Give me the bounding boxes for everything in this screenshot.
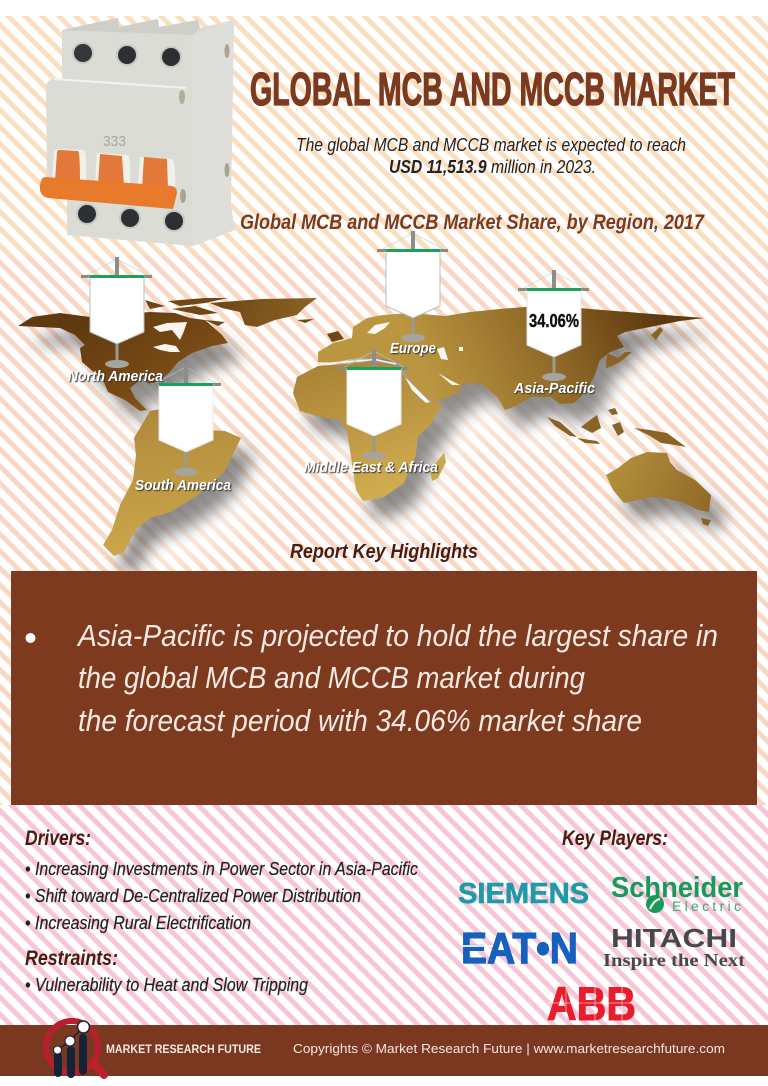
drivers list: • Increasing Investments in Power Sector in Asia-Pacific (25, 859, 418, 879)
logo: Schneider Electric: Electric (672, 898, 741, 914)
logo: Eaton: EAT•N (461, 924, 578, 973)
banner: North America (81, 257, 152, 368)
footer brand name: MARKET RESEARCH FUTURE (106, 1042, 261, 1056)
restraints list: • Vulnerability to Heat and Slow Tripping (25, 975, 308, 995)
banner: Asia-Pacific with value: 34.06% (529, 311, 579, 331)
striped background: top (0, 16, 768, 256)
logo: Hitachi: Inspire the Next (603, 950, 745, 970)
banner: South America (150, 365, 221, 476)
logo: Siemens: SIEMENS (458, 878, 589, 910)
circuit breaker illustration (40, 18, 235, 246)
drivers heading: Drivers: (25, 827, 91, 850)
label: Middle East and Africa: Middle East & Africa (304, 459, 438, 476)
highlight text: Asia-Pacific is projected to hold the largest share in (76, 618, 718, 653)
logo: Schneider Electric: Schneider (611, 872, 743, 904)
subtitle text block (296, 135, 686, 177)
circuit breaker illustration: 333 (103, 133, 126, 150)
drivers list: • Increasing Rural Electrification (25, 913, 251, 933)
drivers list: • Shift toward De-Centralized Power Distribution (25, 886, 361, 906)
map heading: Global MCB and MCCB Market Share, by Region, 2017 (240, 211, 705, 234)
report key highlights heading: Report Key Highlights (290, 541, 478, 563)
banner: Asia-Pacific with value (518, 270, 589, 381)
striped background: bottom (0, 805, 768, 1027)
restraints heading: Restraints: (25, 947, 118, 970)
world map shadow (32, 324, 736, 594)
highlight text: the global MCB and MCCB market during (78, 660, 585, 695)
logo: Market Research Future (46, 1021, 104, 1075)
banner: Middle East and Africa (338, 349, 409, 460)
label: Europe: Europe (390, 340, 436, 357)
logo: Hitachi: HITACHI (611, 923, 737, 953)
logo: ABB: ABB (547, 977, 636, 1030)
logo: Hitachi (603, 923, 745, 970)
bullet (26, 633, 36, 643)
drivers list (25, 859, 418, 933)
label: North America: North America (68, 368, 163, 385)
subtitle text block: USD 11,513.9 million in 2023. (389, 157, 596, 177)
subtitle text block: The global MCB and MCCB market is expected to reach (296, 135, 686, 155)
highlight text: the forecast period with 34.06% market share (78, 703, 642, 738)
striped background: map area (0, 256, 768, 816)
label: Asia-Pacific: Asia-Pacific (513, 380, 596, 397)
key players heading: Key Players: (562, 827, 668, 850)
label: South America: South America (135, 477, 231, 494)
footer bar (0, 1025, 768, 1076)
banner: Europe (377, 231, 448, 342)
footer copyright: Copyrights © Market Research Future | www.marketresearchfuture.com (293, 1041, 725, 1056)
panel: key highlight (11, 571, 757, 805)
world map (18, 298, 711, 556)
highlight text (76, 618, 718, 738)
